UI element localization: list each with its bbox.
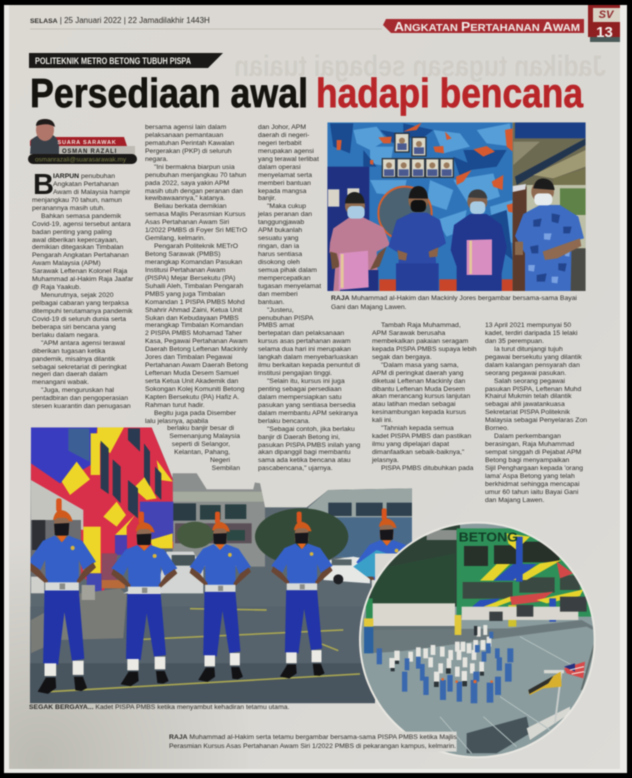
article column 2: lines wrapping around photo: Negeri: [210, 457, 230, 464]
article column 3: "Sebagai contoh, jika berlaku: [267, 426, 355, 433]
article column 3: [257, 124, 361, 472]
man 1: [329, 217, 390, 291]
article column 3: langkah dalam menyebarluaskan: [258, 354, 358, 361]
article column 5: Dalam perkembangan: [494, 433, 561, 440]
headline: [30, 70, 584, 116]
article column 1: menangani wabak.: [32, 379, 89, 386]
article column 5: sempat singgah di Pejabat APM: [485, 449, 581, 456]
article column 3: disokong oleh: [258, 259, 300, 266]
article column 1: Sarawak Leftenan Kolonel Raja: [32, 268, 127, 275]
article column 3: dalam membantu APM sekiranya: [258, 410, 358, 417]
article column 5: dan Majang Lawen.: [485, 497, 544, 504]
article column 2: pelaksanaan pemantauan: [145, 132, 223, 139]
article column 4: APM Sarawak berusaha: [372, 330, 445, 337]
flags: [555, 670, 562, 723]
article column 4: kadet PISPA PMBS dan pastikan: [372, 433, 471, 440]
article column 2: Sukan dan Kebudayaan PMBS: [145, 314, 239, 322]
author box: portrait and nameplate: OSMAN RAZALI: [62, 149, 117, 155]
article column 1: Angkatan Pertahanan: [53, 181, 119, 188]
BETONG sign: BETONG: [459, 530, 518, 545]
porch: [512, 122, 586, 257]
article column 1: Menurutnya, sejak 2020: [41, 292, 114, 299]
article column 2: lines wrapping around photo: Kelantan, Pahang,: [174, 449, 230, 456]
article column 2: Asas Pertahanan Awam Siri: [145, 219, 229, 226]
article column 3: merupakan agensi: [258, 148, 314, 155]
article column 5: dan 35 perempuan.: [485, 338, 544, 345]
article column 1: pelbagai cabaran yang terpaksa: [32, 300, 129, 307]
article column 3: semua pihak dalam: [258, 267, 317, 274]
article column 5: Khairul Mukmin telah dilantik: [485, 393, 572, 400]
article column 2: Daerah Betong Leftenan Mackinly: [145, 346, 247, 353]
article column 2: kewibawaannya," katanya.: [145, 195, 225, 202]
article column 4: membekalkan pakaian seragam: [372, 338, 468, 345]
man 3: [451, 214, 507, 291]
article column 1: [32, 172, 134, 410]
article column 3: dan Johor, APM: [258, 124, 306, 131]
road lines: [50, 609, 360, 692]
article column 5: dalam kalangan pensyarah dan: [485, 362, 580, 369]
article column 3: "Justeru,: [267, 307, 294, 314]
article column 3: selama dua hari ini merupakan: [258, 346, 351, 353]
article column 5: Sijil Penghargaan kepada 'orang: [485, 465, 583, 472]
article column 4: ilmu yang dipelajari dapat: [372, 441, 449, 448]
article column 4: [371, 322, 477, 472]
kadet 1: [28, 498, 96, 694]
article column 4: "Tahniah kepada semua: [381, 425, 454, 432]
article column 2: 1/2022 PMBS di Foyer Sri METrO: [145, 227, 247, 234]
article column 3: banjir di Daerah Betong ini,: [258, 434, 340, 441]
article column 5: pegawai bersekutu yang dilantik: [485, 354, 582, 361]
article column 2: 2 PISPA PMBS Mohamad Taher: [145, 330, 242, 337]
article column 2: Kasa, Pegawai Pertahanan Awam: [145, 338, 248, 345]
author box: portrait and nameplate: [28, 119, 137, 164]
kadet 3: [190, 512, 251, 682]
article column 4: APM di peringkat daerah yang: [372, 370, 463, 377]
article column 4: segak dan bergaya.: [372, 354, 432, 361]
article column 5: seorang pegawai pasukan.: [485, 370, 566, 377]
article column 1: badan penting yang paling: [32, 229, 112, 236]
article column 2: Suhaili Aleh, Timbalan Pengarah: [145, 283, 243, 290]
article column 3: bantuan.: [258, 299, 284, 306]
article column 2: Pengarah Politeknik METrO: [154, 243, 238, 250]
article column 2: semasa Majlis Perasmian Kursus: [145, 211, 245, 218]
article column 3: memberi bantuan: [258, 180, 311, 187]
article column 1: negeri dan daerah dalam: [32, 371, 108, 378]
headline: Persediaan awal: [30, 70, 308, 116]
caption: top photo: Gani dan Majang Lawen.: [331, 304, 407, 310]
article column 5: Salah seorang pegawai: [494, 378, 565, 385]
trees: [255, 508, 348, 565]
article column 5: lama' Aspa Betong yang telah: [485, 473, 575, 480]
article column 3: tugasan menyelamat: [258, 283, 321, 290]
article column 3: daerah di negeri-: [258, 132, 309, 139]
faint show-through headline: Jadikan tugasan sebagai tuaian: [234, 50, 606, 83]
article column 2: Sokongan Kolej Komuniti Betong: [145, 386, 244, 393]
article column 3: institusi pengajian tinggi.: [258, 370, 332, 377]
kicker label: [29, 53, 223, 68]
article column 3: akan dipanggil bagi membantu: [258, 449, 351, 456]
article column 1: Covid-19, agensi tersebut antara: [32, 221, 131, 228]
pavement: [31, 588, 127, 653]
page number box with SV logo: [588, 5, 620, 42]
article column 5: 13 April 2021 mempunyai 50: [485, 322, 571, 329]
caption: top photo: RAJA Muhammad al-Hakim dan Mackinly Jores bergambar bersama-sama Bayai: [331, 295, 577, 302]
article column 3: negeri terbabit: [258, 140, 301, 147]
article column 4: dibantu Leftenan Muda Desem: [372, 386, 465, 392]
caption: aerial photo: Perasmian Kursus Asas Pertahanan Awam Siri 1/2022 PMBS di pekarangan kampus, kelmarin.: [169, 743, 456, 750]
article column 1: awal diberikan kepercayaan,: [32, 236, 118, 244]
article column 1: menjangkau 70 tahun, namun: [32, 197, 122, 204]
article column 3: "Maka cukup: [267, 203, 306, 210]
article column 2: lines wrapping around photo: seperti di Selangor,: [172, 441, 230, 448]
article column 2: Betong Sarawak (PMBS): [145, 251, 221, 258]
article column 1: berlaku dalam negara.: [32, 332, 100, 339]
article column 1: ditempuhi terutamanya pandemik: [32, 308, 132, 315]
article column 5: Malaysia sebagai Penyelaras Zon: [485, 417, 587, 424]
caption: kadets photo: SEGAK BERGAYA... Kadet PISPA PMBS ketika menyambut kehadiran tetamu utama.: [29, 704, 289, 711]
article column 2: lines wrapping around photo: Semenanjung Malaysia: [169, 433, 240, 440]
article column 1: beberapa siri bencana yang: [32, 324, 116, 331]
article column 4: kesinambungan kepada kursus: [372, 409, 466, 416]
article column 2: masih utuh dengan peranan dan: [145, 188, 243, 194]
article column 2: pada 2022, saya yakin APM: [145, 180, 229, 187]
article column 3: kursus asas pertahanan awam: [258, 338, 351, 345]
date line: SELASA | 25 Januari 2022 | 22 Jamadilakhir 1443H: [30, 16, 210, 25]
article column 1: pentadbiran dan pengoperasian: [32, 395, 128, 402]
mural circle: [378, 187, 432, 240]
article column 4: jelasnya.: [372, 457, 399, 464]
article column 3: dalam mempersiapkan satu: [258, 394, 342, 401]
article column 3: tanggungjawab: [258, 219, 304, 226]
article column 3: bertepatan dan pelaksanaan: [258, 330, 344, 337]
article column 3: pasukan yang sentiasa bersedia: [258, 402, 356, 409]
article column 3: penubuhan PISPA: [258, 314, 313, 322]
article column 1: Muhammad al-Hakim Raja Jaafar: [32, 276, 133, 283]
article column 4: kali ini.: [372, 417, 393, 424]
article column 2: Rahman turut hadir.: [145, 402, 205, 409]
article column 3: dan memberi: [258, 291, 298, 298]
article column 2: serta Ketua Unit Akademik dan: [145, 378, 238, 385]
article column 1: Bahkan semasa pandemik: [41, 213, 121, 220]
article column 2: Gemilang, kelmarin.: [145, 235, 205, 242]
article column 4: kepada PISPA PMBS supaya lebih: [372, 346, 477, 353]
article column 3: pascabencana," ujarnya.: [258, 465, 333, 472]
article column 2: [144, 124, 248, 426]
kicker label: POLITEKNIK METRO BETONG TUBUH PISPA: [35, 56, 191, 67]
article column 5: Betong bagi menyampaikan: [485, 457, 569, 464]
article column 2: Beliau berkata demikian: [154, 203, 227, 210]
page number box with SV logo: SV: [599, 9, 615, 21]
page tab: section banner: ANGKATAN PERTAHANAN AWAM: [394, 20, 580, 34]
article column 4: PISPA PMBS ditubuhkan pada: [381, 465, 473, 472]
article column 5: Ia turut ditunjangi tujuh: [494, 346, 563, 353]
article column 3: "Selain itu, kursus ini juga: [267, 378, 345, 385]
article column 2: lalu jelasnya, apabila: [145, 418, 208, 425]
article column 1: peranannya masih utuh.: [32, 205, 105, 212]
article column 5: umur 60 tahun iaitu Bayai Gani: [485, 489, 578, 496]
article column 3: pasukan PISPA PMBS inilah yang: [258, 442, 360, 448]
article column 1: Pengarah Angkatan Pertahanan: [32, 252, 129, 259]
article column 2: lines wrapping around photo: [166, 425, 240, 472]
caption: aerial photo: [168, 734, 458, 750]
article column 3: banjir.: [258, 195, 276, 202]
right building: [308, 488, 412, 567]
article column 2: Kapten Bersekutu (PA) Hafiz A.: [145, 394, 239, 401]
article column 5: berasingan, Raja Muhammad: [485, 441, 574, 448]
article column 5: kadet, terdiri daripada 15 lelaki: [485, 330, 578, 337]
article column 2: merangkap Timbalan Komandan: [145, 322, 243, 329]
mid building: [173, 473, 265, 567]
article column 2: Pergerakan (PKP) di seluruh: [145, 148, 232, 155]
article column 1: pandemik, misalnya dilantik: [32, 356, 115, 363]
article column 2: pematuhan Perintah Kawalan: [145, 140, 234, 147]
article column 3: kepada mangsa: [258, 188, 306, 194]
article column 4: diketuai Leftenan Mackinly dan: [372, 378, 465, 385]
article column 1: Awam Malaysia (APM): [32, 260, 101, 267]
article column 1: "Juga, menguruskan hal: [41, 387, 114, 394]
article column 4: akan merancang kursus lanjutan: [372, 393, 470, 400]
colourful building: [31, 427, 173, 597]
shopfront: [31, 480, 83, 530]
article column 3: menyelamat serta: [258, 172, 312, 179]
headline: hadapi bencana: [316, 70, 584, 116]
article column 1: Awam di Malaysia hampir: [53, 189, 130, 196]
article column 4: dimanfaatkan sebaik-baiknya,": [372, 449, 464, 456]
article column 2: Pertahanan Awam Daerah Betong: [145, 362, 248, 369]
cars: [123, 552, 203, 593]
article column 3: jelas peranan dan: [258, 211, 312, 218]
crowd: [389, 625, 491, 682]
article column 4: atau latihan medan sebagai: [372, 401, 456, 408]
article column 3: mempercepatkan: [258, 275, 311, 282]
article column 1: Covid-19 di seluruh dunia serta: [32, 316, 126, 323]
article column 5: berkhidmat sehingga mencapai: [485, 481, 579, 488]
article column 4: Tambah Raja Muhammad,: [381, 322, 461, 329]
article column 2: (PISPA) Mejar Bersekutu (PA): [145, 275, 235, 282]
photo: four officers with folders: [327, 122, 586, 291]
man 2: [388, 212, 446, 264]
article column 5: Sekretariat PISPA Politeknik: [485, 409, 570, 416]
caption: top photo: [330, 294, 578, 312]
article column 5: [484, 322, 588, 504]
article column 2: Institusi Pertahanan Awam: [145, 267, 225, 274]
article column 3: dalam operasi: [258, 164, 301, 171]
article column 3: harus sentiasa: [258, 251, 302, 258]
article column 3: sama ada ketika bencana atau: [258, 457, 351, 464]
article column 1: demikian ditegaskan Timbalan: [32, 244, 123, 251]
photo: aerial view of group in front of Betong campus: [358, 522, 596, 758]
article column 3: yang terawal terlibat: [258, 156, 319, 163]
page number box with SV logo: 13: [596, 24, 613, 41]
article column 1: "APM antara agensi terawal: [41, 340, 125, 347]
kadet 4: [271, 512, 333, 678]
author box: portrait and nameplate: SUARA SARAWAK: [58, 140, 116, 146]
article column 4: "Dalam masa yang sama,: [381, 362, 459, 369]
article column 3: PMBS amat: [258, 322, 294, 329]
article column 5: sebagai ahli jawatankuasa: [485, 401, 565, 408]
kadet 2: [111, 512, 177, 686]
article column 3: ringan, dan ia: [258, 243, 299, 250]
article column 5: pasukan PISPA, Leftenan Muhd: [485, 386, 581, 392]
article column 5: Borneo.: [485, 425, 509, 432]
article column 3: berlaku bencana.: [258, 418, 310, 425]
author box: portrait and nameplate: osmanrazali@suarasarawak.my: [35, 156, 127, 164]
article column 2: PMBS yang juga Timbalan: [145, 291, 225, 298]
article column 1: sebagai sekretariat di peringkat: [32, 364, 126, 370]
article column 2: Leftenan Muda Desem Samuel: [145, 370, 239, 377]
article column 1: @ Raja Yaakub.: [32, 284, 81, 291]
article column 2: Shahrir Ahmad Zaini, Ketua Unit: [145, 307, 242, 314]
article column 1: stesen kuarantin dan penugasan: [32, 403, 131, 410]
article column 3: ilmu berkaitan kepada penuntut di: [258, 362, 360, 369]
article column 2: lines wrapping around photo: berlaku banjir besar di: [167, 425, 234, 432]
article column 2: lines wrapping around photo: Sembilan: [212, 465, 240, 472]
article column 2: penubuhan menjangkau 70 tahun: [145, 172, 246, 179]
article column 2: negara.: [145, 156, 168, 163]
article column 1: IARPUN penubuhan: [53, 173, 115, 180]
article column 2: merangkap Komandan Pasukan: [145, 259, 242, 266]
article column 2: "Ini bermakna biarpun usia: [154, 164, 235, 171]
article column 2: bersama agensi lain dalam: [145, 124, 226, 131]
drop cap: B: [33, 169, 54, 201]
kadet 5: [356, 508, 406, 587]
man 4: [515, 205, 584, 291]
article column 3: sesuatu yang: [258, 235, 298, 242]
caption: aerial photo: RAJA Muhammad al-Hakim serta tetamu bergambar bersama-sama PISPA PMBS ketika Majlis: [169, 734, 457, 741]
article column 2: Komandan 1 PISPA PMBS Mohd: [145, 299, 245, 306]
article column 3: APM bukanlah: [258, 227, 302, 234]
photo: kadets at attention in front of colourful building: [20, 420, 420, 707]
article column 2: Jores dan Timbalan Pegawai: [145, 354, 232, 361]
article column 1: diberikan tugasan ketika: [32, 348, 105, 355]
article column 3: penting sebagai persediaan: [258, 386, 342, 393]
article column 2: Begitu juga pada Disember: [154, 410, 236, 417]
